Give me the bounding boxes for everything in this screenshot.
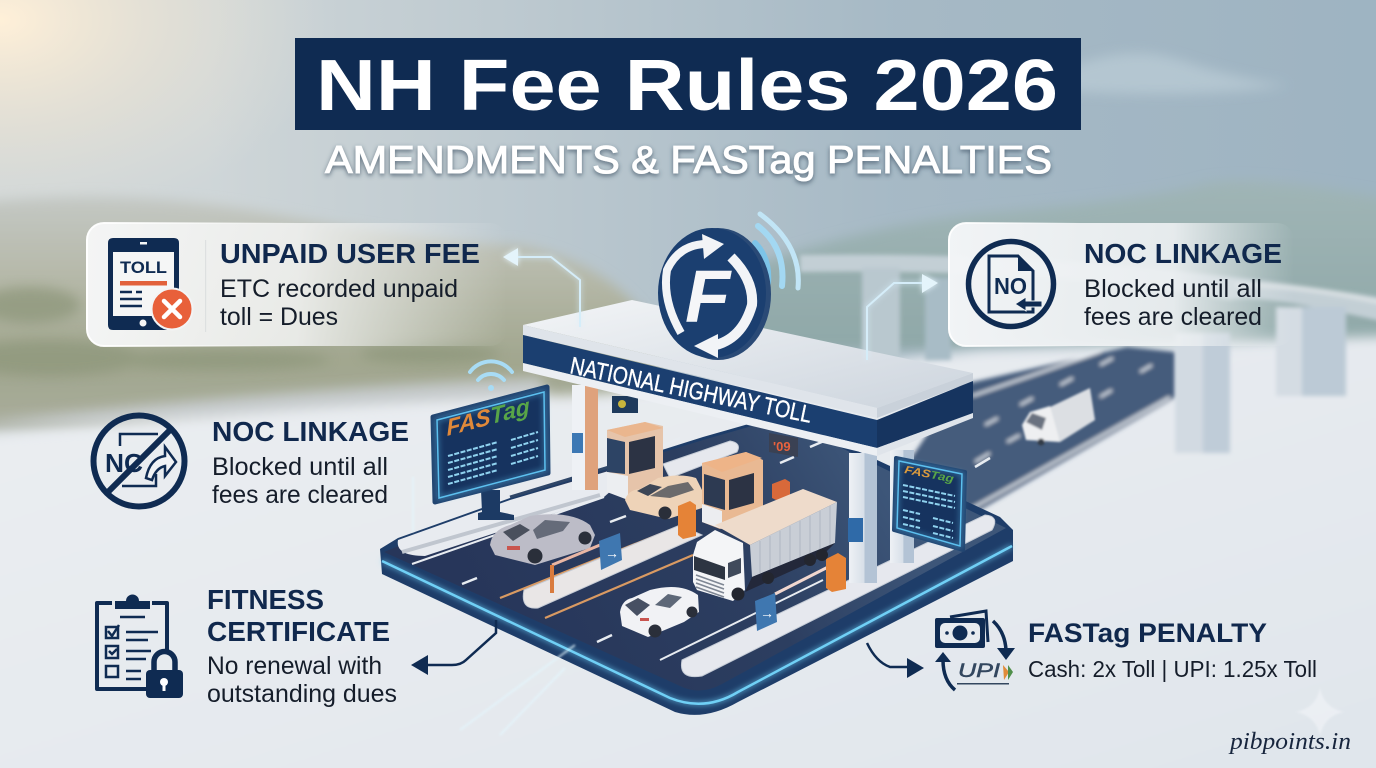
heading: FITNESS bbox=[207, 584, 324, 615]
heading: NOC LINKAGE bbox=[1084, 238, 1282, 269]
panel: NOC linkage right bbox=[949, 223, 1294, 346]
blue lane signs bbox=[599, 533, 777, 631]
booth two bbox=[702, 452, 763, 529]
icon: prohibited NOC bbox=[94, 416, 184, 506]
icon: F toll badge bbox=[658, 214, 798, 360]
arrow: to unpaid user fee bbox=[503, 248, 580, 327]
text block: outstanding dues bbox=[207, 680, 397, 708]
heading: FASTag PENALTY bbox=[1028, 618, 1267, 648]
text block: ETC recorded unpaid bbox=[220, 275, 458, 303]
canopy sign text: NATIONAL HIGHWAY TOLL bbox=[568, 352, 814, 429]
lane markings bbox=[412, 438, 990, 660]
light beams bbox=[413, 477, 575, 735]
heading: CERTIFICATE bbox=[207, 616, 390, 647]
arrow: to NOC linkage bbox=[867, 274, 938, 360]
barrier gate and orange posts bbox=[550, 479, 846, 594]
booth one bbox=[607, 422, 663, 500]
icon: wifi signal bbox=[470, 361, 512, 391]
icon: sparkle watermark bbox=[1296, 688, 1344, 736]
arrow: to fitness certificate bbox=[411, 620, 496, 675]
subtitle: AMENDMENTS & FASTag PENALTIES bbox=[325, 139, 1052, 182]
glowing edge bbox=[382, 546, 1012, 704]
icon: cash and UPI cycle: UPI bbox=[958, 661, 1001, 682]
platform road surface bbox=[384, 418, 1006, 691]
text block: Cash: 2x Toll | UPI: 1.25x Toll bbox=[1028, 656, 1317, 682]
icon: toll tablet with red cross: TOLL bbox=[120, 259, 167, 277]
background: overpass bbox=[800, 255, 1376, 453]
car: silver bbox=[490, 514, 595, 565]
text block bbox=[220, 275, 458, 331]
title banner: NH Fee Rules 2026 bbox=[316, 46, 1058, 126]
icon: cash and UPI cycle bbox=[935, 611, 1015, 690]
panel: fitness certificate bbox=[97, 584, 397, 708]
blue lane signs: → bbox=[760, 605, 774, 621]
icon: red lane display: '09 bbox=[773, 439, 791, 454]
heading bbox=[207, 584, 390, 647]
text block: Blocked until all bbox=[1084, 275, 1262, 303]
heading: UNPAID USER FEE bbox=[220, 238, 480, 269]
FASTag screen right: FASTag bbox=[903, 464, 955, 486]
text block: Blocked until all bbox=[212, 453, 388, 481]
heading: NOC LINKAGE bbox=[212, 416, 409, 447]
back column bbox=[890, 450, 914, 563]
watermark text: pibpoints.in bbox=[1228, 729, 1351, 755]
panel: NOC linkage left bbox=[94, 416, 409, 509]
background: receding highway bbox=[880, 347, 1176, 518]
icon: NOC document: NO bbox=[994, 273, 1027, 299]
panel: FASTag penalty bbox=[935, 611, 1317, 690]
car: white bbox=[620, 587, 699, 638]
blue lane signs: → bbox=[605, 545, 619, 561]
text block: fees are cleared bbox=[212, 481, 388, 509]
icon: F toll badge: F bbox=[685, 255, 732, 338]
car: beige bbox=[625, 476, 702, 520]
icon: toll tablet with red cross bbox=[108, 238, 192, 330]
icon: red lane display bbox=[769, 433, 798, 457]
panel: unpaid user fee bbox=[87, 223, 507, 346]
arrow: to FASTag penalty bbox=[867, 643, 924, 678]
text block bbox=[1084, 275, 1262, 331]
FASTag screen right bbox=[894, 458, 965, 550]
front column bbox=[848, 453, 877, 583]
truck bbox=[693, 489, 837, 601]
text block bbox=[212, 453, 388, 509]
icon: prohibited NOC: NC bbox=[105, 448, 143, 478]
icon: NOC document bbox=[968, 242, 1054, 326]
traffic islands bbox=[523, 441, 995, 677]
text block bbox=[207, 652, 397, 708]
canopy roof bbox=[523, 300, 973, 456]
icon: clipboard with padlock bbox=[97, 594, 183, 698]
FASTag screen left: FASTag bbox=[446, 393, 530, 441]
FASTag screen left bbox=[433, 387, 548, 520]
platform base bbox=[380, 415, 1013, 715]
left light pad and island bbox=[398, 466, 612, 556]
background: blurred van bbox=[1022, 388, 1095, 446]
text block: No renewal with bbox=[207, 652, 382, 680]
toll plaza illustration bbox=[380, 214, 1013, 735]
icon: traffic light bbox=[612, 396, 638, 413]
text block: fees are cleared bbox=[1084, 303, 1262, 331]
left column bbox=[572, 385, 598, 490]
text block: toll = Dues bbox=[220, 303, 338, 331]
